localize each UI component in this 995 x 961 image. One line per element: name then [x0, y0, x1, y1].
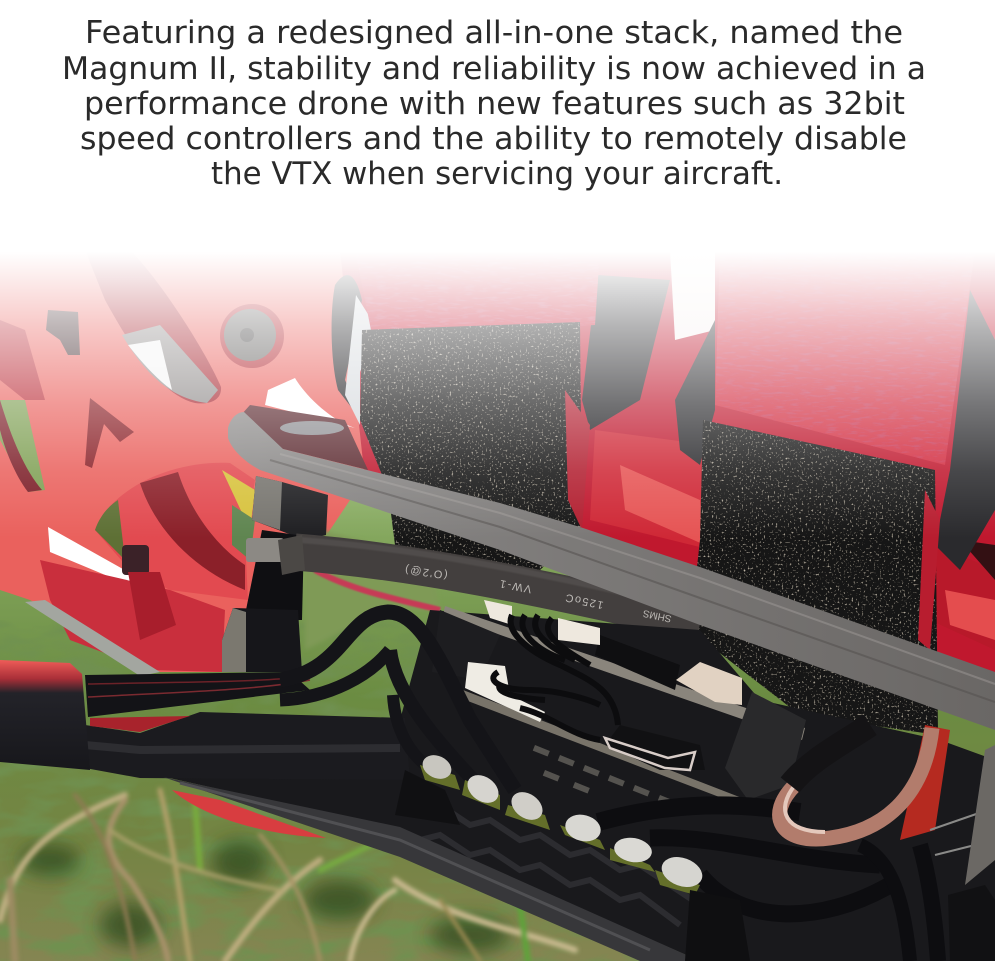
photo: heat-shrink antenna tube: (O'2@)	[403, 563, 448, 581]
photo: heat-shrink antenna tube: 125oC	[563, 591, 605, 611]
photo: small black wires, lower connector	[493, 672, 600, 740]
frame white highlight	[48, 527, 146, 588]
photo: dark coax end	[790, 725, 870, 785]
photo: heat-shrink antenna tube: SHMS	[642, 607, 673, 624]
photo: red battery strap, right	[715, 250, 975, 465]
photo: heat-shrink antenna tube: VW-1	[498, 577, 533, 595]
description text: the VTX when servicing your aircraft.	[211, 156, 783, 192]
photo: red frame on the right behind the straps	[340, 250, 995, 690]
photo: ESC heat-shrink sleeve	[0, 660, 90, 770]
photo: blurred red motor arm and frame	[0, 250, 370, 672]
photo: red battery strap, left	[355, 250, 600, 335]
photo: stack white connector lower	[465, 662, 545, 722]
photo: grass background	[0, 480, 995, 961]
photo: upper standoff base, centre	[395, 770, 460, 825]
frame opening: oval with motor	[85, 250, 221, 403]
photo: red disc below arm	[172, 790, 326, 838]
frame left opening	[0, 400, 45, 492]
photo: four-wire ESC lead	[85, 612, 515, 790]
frame cut: triangle	[85, 398, 134, 468]
red strap edge	[565, 390, 590, 530]
photo: carbon bottom plate zigzag	[420, 805, 700, 925]
photo: motor wires to the right	[598, 805, 938, 961]
photo: top carbon plate surface	[232, 405, 368, 470]
frame small post	[122, 545, 149, 575]
photo: solder pads	[419, 751, 707, 895]
frame screw: left	[46, 310, 80, 355]
frame lower red block	[40, 560, 225, 672]
photo: stack white connector top	[484, 600, 600, 645]
photo: stack standoff left	[432, 610, 500, 680]
photo: stack lower board	[460, 690, 742, 803]
description text: performance drone with new features such as 32bit	[84, 86, 905, 122]
plate washer	[280, 421, 344, 435]
description text	[62, 15, 926, 192]
photo: standoff, top	[252, 476, 328, 540]
photo: top carbon plate edge	[228, 412, 995, 730]
description text: Magnum II, stability and reliability is now achieved in a	[62, 51, 926, 87]
photo: dark strap buckle middle	[582, 275, 670, 430]
photo: heat-shrink antenna tube	[246, 535, 700, 624]
red-pink wire behind	[315, 570, 440, 610]
photo: dark electronics cavity	[165, 610, 995, 961]
frame lower opening	[95, 463, 255, 600]
photo: middle green gap between plate and stack	[305, 525, 440, 650]
photo: red capacitor sleeve	[900, 725, 950, 840]
photo: ESC board chips row	[533, 745, 675, 807]
photo: standoff, bottom	[222, 608, 302, 672]
photo: small black wires, top connector	[511, 615, 618, 725]
photo: velcro strap, left	[360, 322, 582, 570]
description text: speed controllers and the ability to remotely disable	[80, 121, 907, 157]
red strap edge right	[918, 490, 940, 650]
photo: tactile button	[676, 662, 742, 705]
photo: dark strap buckle right	[675, 320, 715, 465]
photo: standoff, shaft	[244, 530, 304, 620]
photo: micro-USB connector	[605, 725, 705, 770]
photo: stack standoff right	[725, 692, 806, 800]
photo: copper antenna wire	[780, 728, 932, 839]
photo: stack upper board	[443, 606, 805, 740]
white arm strip	[265, 378, 355, 428]
photo: grey arm strip, lower left	[25, 600, 160, 676]
photo: lower carbon plate edge	[163, 777, 700, 961]
photo: velcro strap, right	[690, 420, 938, 735]
photo: dark strap buckle left	[332, 275, 365, 425]
photo: stack chip top	[595, 635, 680, 690]
red strip beneath the lead	[90, 716, 190, 732]
frame screw: motor bolt	[220, 304, 284, 368]
photo: grey carbon strut, right	[965, 745, 995, 885]
description text: Featuring a redesigned all-in-one stack, named the	[85, 15, 903, 51]
photo: carbon fibre arm with the ESC lead	[85, 712, 410, 780]
photo: lower standoff, bottom centre	[685, 890, 750, 961]
photo: thin metal wires	[930, 812, 982, 855]
